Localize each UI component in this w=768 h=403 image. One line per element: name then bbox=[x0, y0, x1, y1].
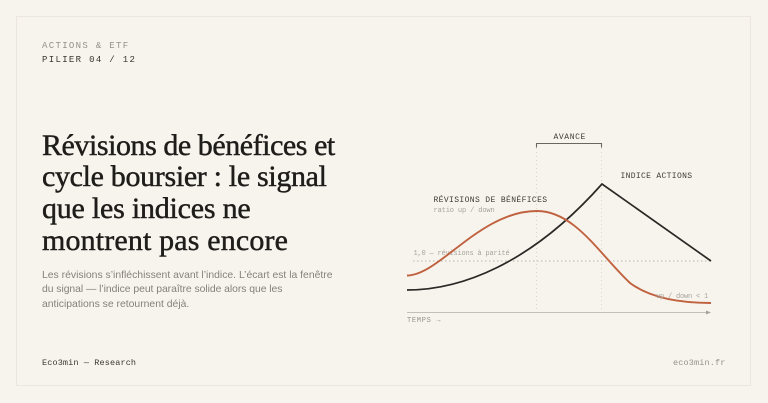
description text bbox=[42, 270, 333, 310]
eyebrow: category: ACTIONS & ETF bbox=[42, 40, 130, 50]
title bbox=[42, 128, 336, 257]
description text: du signal — l’indice peut paraître solide alors que les bbox=[42, 284, 282, 295]
low ratio label: up / down < 1 bbox=[656, 293, 708, 301]
footer: website: eco3min.fr bbox=[673, 358, 726, 368]
revisions sublabel: ratio up / down bbox=[434, 207, 495, 215]
title: montrent pas encore bbox=[42, 224, 288, 257]
parity label: 1,0 — révisions à parité bbox=[414, 250, 510, 258]
footer: brand: Eco3min — Research bbox=[42, 358, 136, 368]
equity index curve bbox=[407, 184, 711, 290]
eyebrow: pillar number: PILIER 04 / 12 bbox=[42, 54, 136, 64]
title: Révisions de bénéfices et bbox=[42, 128, 335, 162]
description text: anticipations se retournent déjà. bbox=[42, 298, 189, 310]
title: cycle boursier : le signal bbox=[42, 160, 327, 193]
axis label: TEMPS → bbox=[407, 317, 441, 325]
avance label: AVANCE bbox=[554, 133, 586, 142]
time axis bbox=[407, 310, 711, 314]
description text: Les révisions s’infléchissent avant l’indice. L’écart est la fenêtre bbox=[42, 270, 333, 280]
avance bracket bbox=[536, 144, 602, 148]
lead window guides bbox=[536, 148, 602, 311]
revisions curve bbox=[407, 211, 711, 303]
revisions label: RÉVISIONS DE BÉNÉFICES bbox=[434, 196, 547, 205]
index label: INDICE ACTIONS bbox=[620, 172, 692, 181]
parity line bbox=[413, 260, 711, 262]
title: que les indices ne bbox=[42, 192, 250, 225]
